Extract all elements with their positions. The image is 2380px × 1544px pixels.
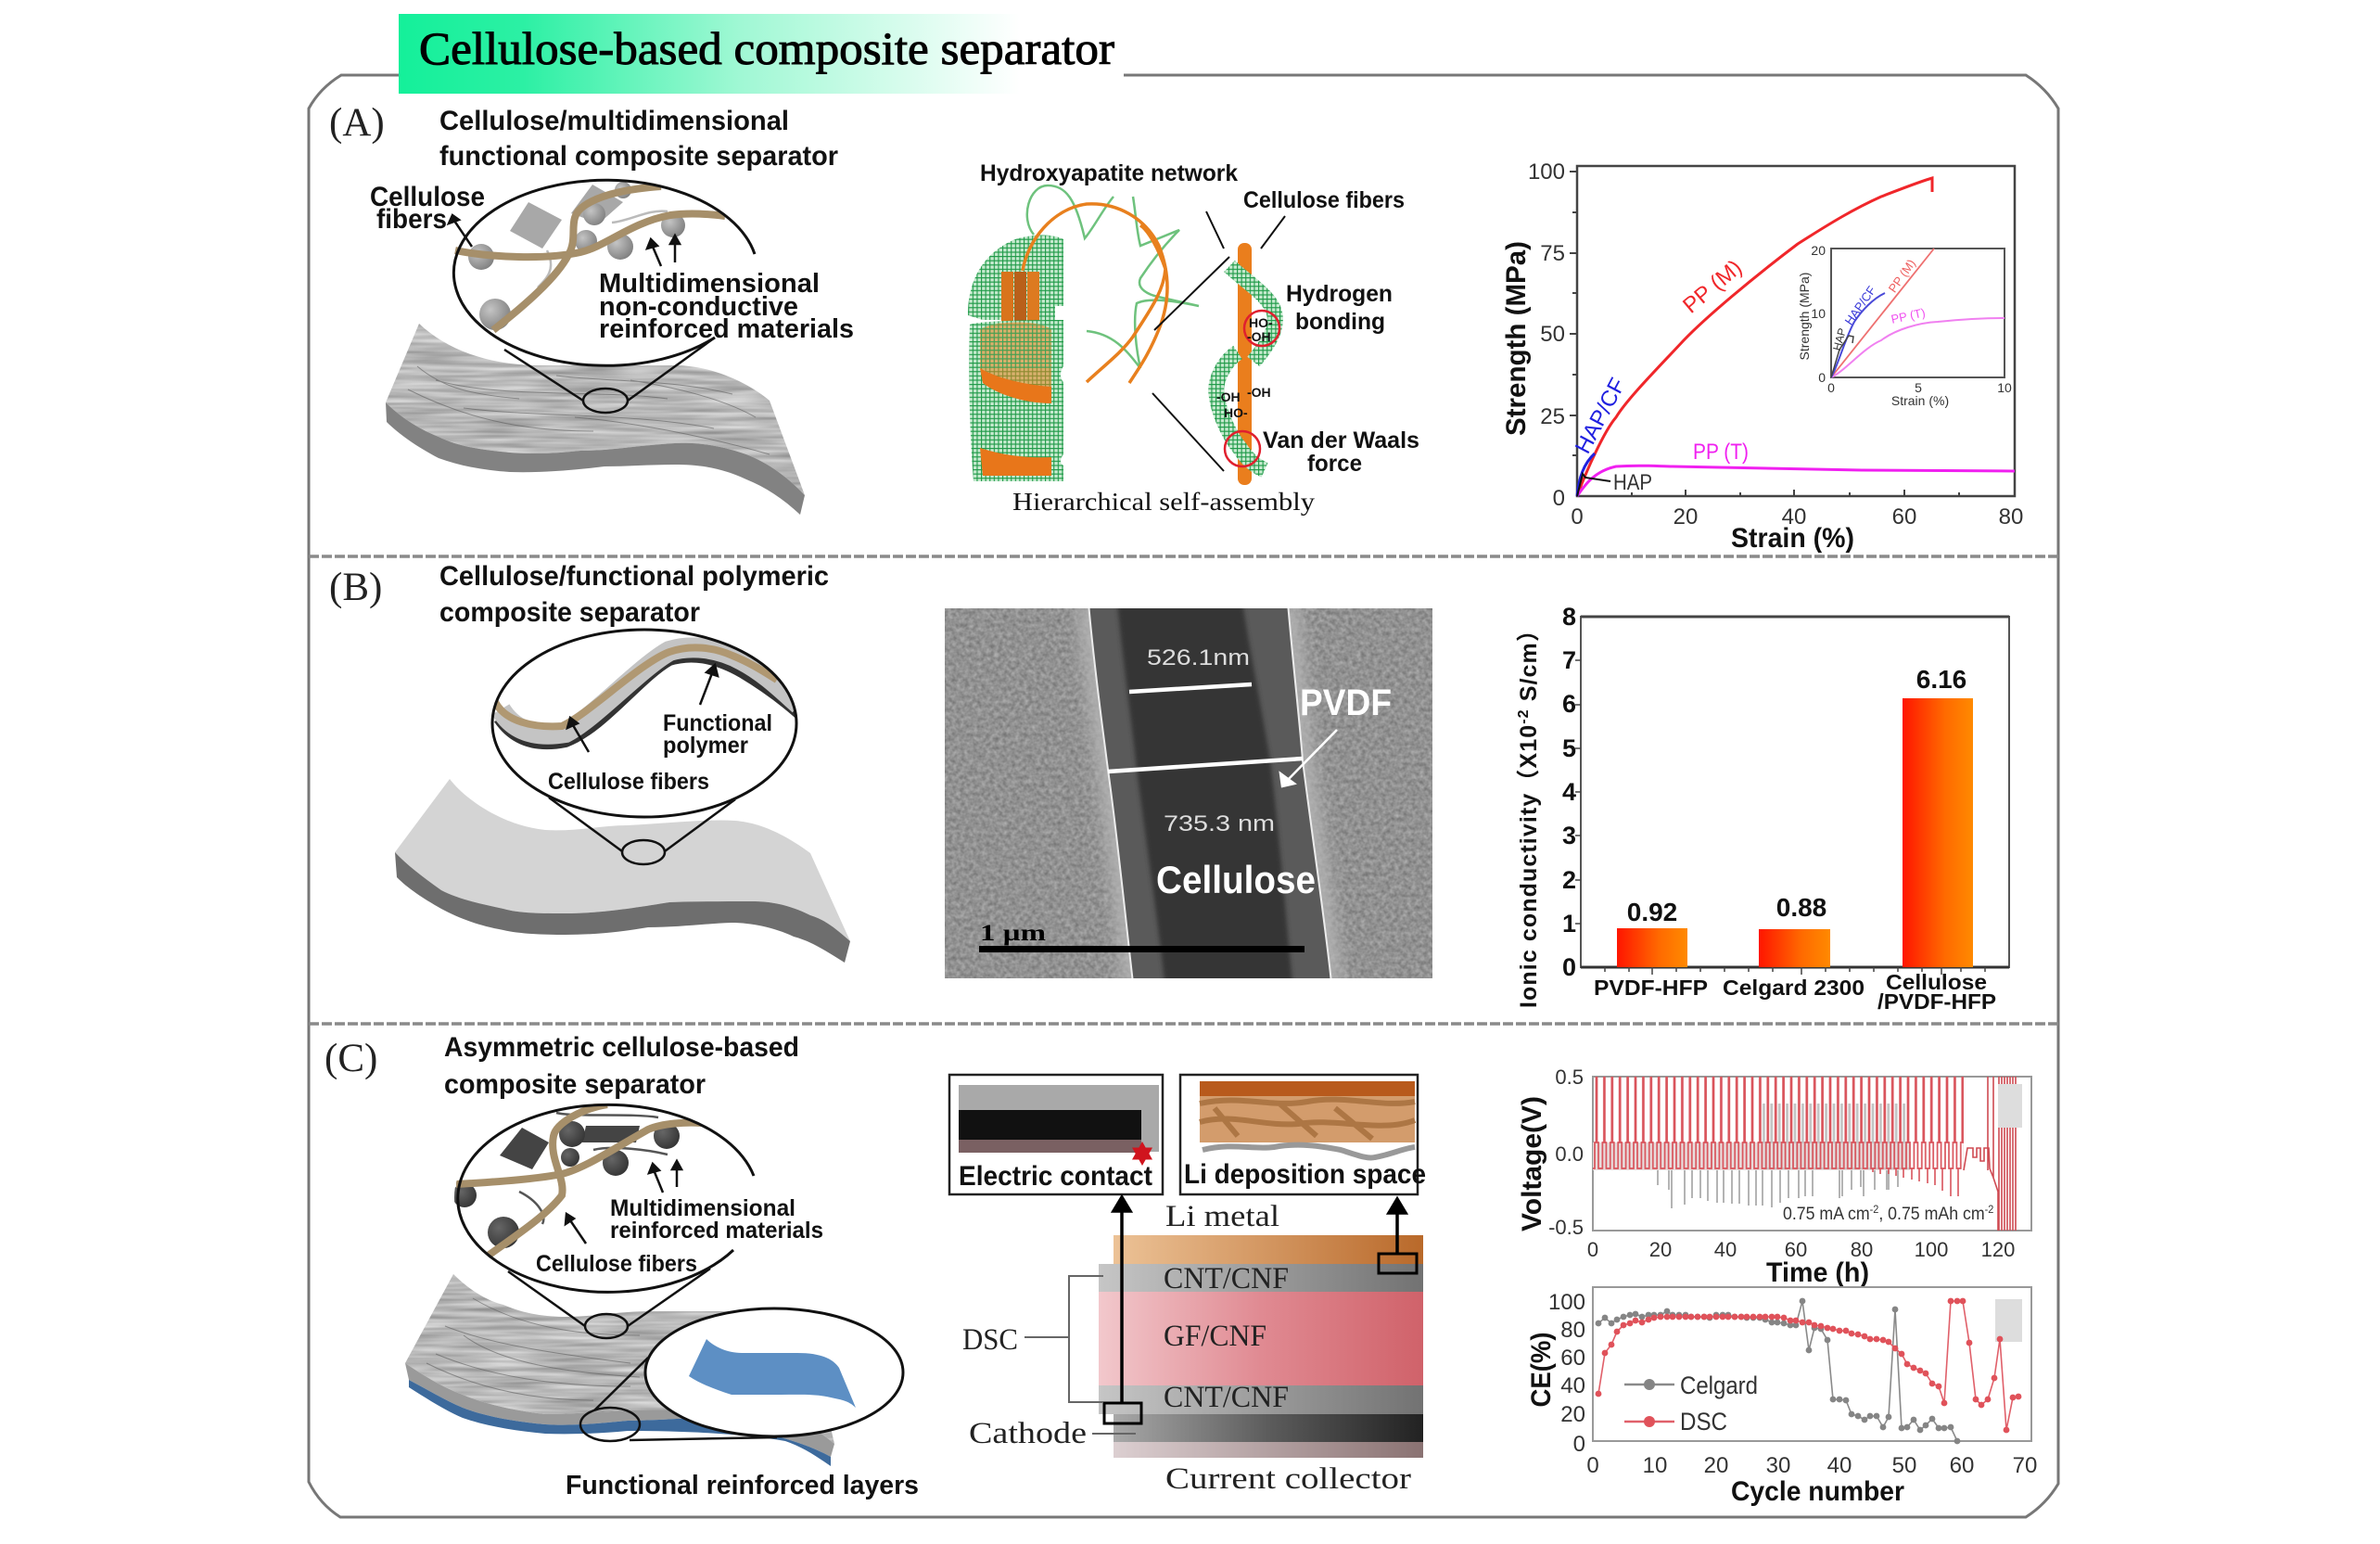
fibre with helical ribbon: -OH bbox=[1247, 385, 1271, 400]
label: multidimensional materials bbox=[599, 269, 854, 344]
inset chart: 0 bbox=[1827, 380, 1835, 395]
labels: hierarchical self-assembly: Hierarchical self-assembly bbox=[1012, 488, 1316, 516]
label: functional reinforced layers: Functional reinforced layers bbox=[566, 1471, 919, 1500]
y-axis ticks: 6 bbox=[1562, 690, 1576, 718]
legend bbox=[1624, 1372, 1758, 1436]
layer labels: Cathode bbox=[969, 1417, 1087, 1450]
hierarchical self-assembly illustration bbox=[968, 160, 1419, 516]
magnified circle C bbox=[452, 1104, 755, 1292]
heading B: composite separator bbox=[439, 597, 700, 628]
layer labels: CNT/CNF bbox=[1164, 1381, 1289, 1414]
labels: functional polymer: Functional bbox=[663, 710, 772, 736]
labels: hierarchical self-assembly: bonding bbox=[1295, 309, 1385, 335]
CE tick labels: 60 bbox=[1950, 1453, 1974, 1478]
arrow to Li deposition bbox=[1389, 1199, 1406, 1254]
inset: electric contact bbox=[949, 1075, 1163, 1194]
fibre with helical ribbon: HO- bbox=[1249, 315, 1273, 330]
label: cellulose fibers: Cellulose bbox=[370, 182, 485, 212]
y-axis ticks: 3 bbox=[1562, 822, 1576, 849]
magnified circle B bbox=[492, 630, 799, 817]
cellulose label: Cellulose bbox=[1156, 858, 1316, 901]
arrow: cellulose fibers bbox=[449, 215, 472, 247]
voltage y title: Voltage(V) bbox=[1517, 1096, 1547, 1231]
labels in circle C: Multidimensional bbox=[610, 1195, 795, 1221]
heading A: functional composite separator bbox=[439, 141, 838, 172]
fibre with helical ribbon: HO- bbox=[1224, 405, 1248, 420]
heading C bbox=[444, 1032, 799, 1100]
voltage tick labels bbox=[1548, 1065, 2015, 1261]
labels: hierarchical self-assembly: Hydrogen bbox=[1286, 281, 1393, 307]
inset chart: 10 bbox=[1811, 306, 1826, 321]
label: multidimensional materials: non-conductive bbox=[599, 292, 798, 322]
inset chart: PP (T) bbox=[1890, 305, 1927, 326]
layer labels bbox=[962, 1200, 1411, 1496]
inset chart: 5 bbox=[1915, 380, 1922, 395]
bar values: 0.88 bbox=[1776, 893, 1826, 922]
layer labels: Current collector bbox=[1165, 1462, 1411, 1496]
CE tick labels: 10 bbox=[1643, 1453, 1667, 1478]
rate annotation: -2 bbox=[1870, 1205, 1878, 1216]
bar Celgard 2300 bbox=[1759, 929, 1830, 967]
axis tick labels: 25 bbox=[1540, 404, 1565, 429]
rate annotation: -2 bbox=[1985, 1205, 1993, 1216]
inset chart: HAP bbox=[1830, 326, 1849, 352]
axis tick labels: 20 bbox=[1674, 504, 1698, 530]
zoom ellipse C1 bbox=[508, 1269, 710, 1338]
y-axis ticks bbox=[1562, 603, 1576, 981]
voltage tick labels: -0.5 bbox=[1548, 1216, 1584, 1239]
axis tick labels: 0 bbox=[1571, 504, 1584, 530]
separator sheet B bbox=[395, 779, 850, 963]
voltage tick labels: 100 bbox=[1915, 1238, 1948, 1261]
category labels: Cellulose bbox=[1886, 970, 1987, 994]
x-axis title: Strain (%) bbox=[1731, 523, 1854, 554]
bar values bbox=[1627, 665, 1966, 926]
labels: hierarchical self-assembly bbox=[980, 160, 1419, 516]
labels: hierarchical self-assembly: Hydroxyapatite network bbox=[980, 160, 1238, 186]
axis tick labels: 40 bbox=[1782, 504, 1806, 530]
inset chart: 10 bbox=[1997, 380, 2012, 395]
heading C: composite separator bbox=[444, 1069, 706, 1100]
PVDF arrow bbox=[1280, 730, 1337, 786]
voltage tick labels: 0.5 bbox=[1555, 1065, 1584, 1089]
panel: C asymmetric separator bbox=[325, 1032, 2037, 1507]
heading A bbox=[439, 106, 838, 172]
curve PP (T) bbox=[1577, 466, 2015, 496]
labels in circle C: reinforced materials bbox=[610, 1218, 823, 1244]
legend: DSC bbox=[1680, 1408, 1727, 1436]
inset: Li deposition space: Li deposition space bbox=[1184, 1159, 1426, 1190]
fibre with helical ribbon: -OH bbox=[1216, 389, 1241, 404]
CE y title: CE(%) bbox=[1526, 1332, 1557, 1408]
inset chart: HAP/CF bbox=[1841, 284, 1878, 327]
chart: stress-strain bbox=[1501, 160, 2023, 554]
rate annotation: , 0.75 mAh cm bbox=[1878, 1203, 1985, 1223]
CE tick labels: 70 bbox=[2013, 1453, 2037, 1478]
inset chart bbox=[1797, 243, 2012, 408]
CE tick labels: 40 bbox=[1827, 1453, 1852, 1478]
zoom lines and pointer arrows bbox=[1152, 211, 1285, 471]
axis tick labels bbox=[1528, 160, 2023, 530]
arrows: reinforced materials bbox=[647, 236, 680, 266]
curve labels bbox=[1571, 255, 1749, 495]
y-axis ticks: 5 bbox=[1562, 734, 1576, 762]
labels: functional polymer: Cellulose fibers bbox=[548, 769, 709, 795]
voltage traces bbox=[1593, 1077, 2016, 1231]
y-axis title: Ionic conductivity（X10 bbox=[1516, 724, 1542, 1008]
bar values: 6.16 bbox=[1916, 665, 1966, 694]
Celgard series bbox=[1598, 1301, 1957, 1441]
y-axis ticks: 8 bbox=[1562, 603, 1576, 631]
chart: coulombic efficiency bbox=[1526, 1287, 2037, 1507]
selection boxes bbox=[1104, 1254, 1417, 1423]
separator sheet C with blue layer bbox=[405, 1274, 834, 1466]
arrows: polymer and fibers bbox=[567, 665, 718, 752]
zoom ellipse A bbox=[504, 338, 715, 413]
axis tick labels: 0 bbox=[1553, 486, 1565, 511]
labels: hierarchical self-assembly: force bbox=[1307, 451, 1362, 477]
legend: Celgard bbox=[1680, 1372, 1758, 1399]
inset chart: 0 bbox=[1818, 370, 1826, 385]
arrows in circle C bbox=[566, 1161, 681, 1244]
y-axis title: -2 bbox=[1516, 708, 1532, 724]
CE tick labels: 60 bbox=[1560, 1346, 1585, 1371]
CE tick labels bbox=[1548, 1290, 2037, 1478]
heading C: Asymmetric cellulose-based bbox=[444, 1032, 799, 1063]
layer labels: Li metal bbox=[1165, 1200, 1279, 1233]
chart: voltage vs time bbox=[1517, 1065, 2031, 1288]
CE tick labels: 80 bbox=[1560, 1318, 1585, 1343]
category labels: PVDF-HFP bbox=[1594, 976, 1708, 1000]
layer labels: DSC bbox=[962, 1323, 1018, 1357]
panel label A: (A) bbox=[329, 101, 385, 145]
layer labels: GF/CNF bbox=[1164, 1320, 1266, 1353]
heading B bbox=[439, 561, 829, 628]
y-axis title: Strength (MPa) bbox=[1501, 241, 1532, 436]
panel label B: (B) bbox=[329, 566, 382, 609]
curve HAP/CF bbox=[1577, 453, 1595, 496]
panel frame bbox=[309, 75, 2058, 1517]
fibre with helical ribbon bbox=[1216, 243, 1279, 485]
TEM micrograph: 735.3 nm bbox=[1164, 811, 1275, 836]
axis tick labels: 50 bbox=[1540, 322, 1565, 347]
bar Cellulose/PVDF-HFP bbox=[1903, 698, 1973, 967]
axis tick labels: 100 bbox=[1528, 160, 1565, 185]
panel label C: (C) bbox=[325, 1037, 377, 1080]
layered cell schematic bbox=[949, 1075, 1426, 1496]
magnified circle A bbox=[451, 178, 755, 365]
CE x title: Cycle number bbox=[1731, 1476, 1904, 1507]
y-axis ticks: 7 bbox=[1562, 646, 1576, 674]
inset chart: Strength (MPa) bbox=[1797, 273, 1812, 360]
panel: B cellulose/functional polymeric bbox=[329, 561, 2009, 1014]
label: multidimensional materials: Multidimensional bbox=[599, 269, 820, 299]
unravelled fibres bbox=[1023, 185, 1199, 383]
CE tick labels: 20 bbox=[1560, 1402, 1585, 1427]
inset: electric contact: Electric contact bbox=[959, 1161, 1152, 1192]
inset chart: 20 bbox=[1811, 243, 1826, 258]
measurement lines bbox=[1108, 684, 1303, 772]
layer stack bbox=[1099, 1235, 1423, 1458]
inset chart: PP (M) bbox=[1886, 257, 1918, 295]
layer labels: CNT/CNF bbox=[1164, 1262, 1289, 1295]
y-axis ticks: 2 bbox=[1562, 866, 1576, 894]
axis tick labels: 80 bbox=[1999, 504, 2023, 530]
voltage tick labels: 60 bbox=[1785, 1238, 1807, 1261]
panel: A cellulose/multidimensional bbox=[329, 101, 2023, 554]
axis tick labels: 75 bbox=[1540, 241, 1565, 266]
hydroxyapatite network cylinder bbox=[968, 236, 1063, 481]
category labels bbox=[1594, 970, 1996, 1014]
y-axis title: S/cm） bbox=[1516, 618, 1542, 708]
CE tick labels: 40 bbox=[1560, 1373, 1585, 1398]
heading B: Cellulose/functional polymeric bbox=[439, 561, 829, 592]
labels: functional polymer bbox=[548, 710, 772, 795]
category labels: /PVDF-HFP bbox=[1877, 989, 1996, 1014]
scale bar bbox=[979, 921, 1305, 952]
labels: hierarchical self-assembly: Van der Waals bbox=[1263, 427, 1419, 453]
y-axis ticks: 0 bbox=[1562, 953, 1576, 981]
PVDF label: PVDF bbox=[1300, 683, 1392, 723]
voltage tick labels: 80 bbox=[1851, 1238, 1873, 1261]
CE tick labels: 0 bbox=[1573, 1432, 1585, 1457]
chart: ionic conductivity bbox=[1516, 603, 2009, 1014]
voltage tick labels: 0 bbox=[1587, 1238, 1598, 1261]
y-axis ticks: 1 bbox=[1562, 910, 1576, 938]
inset: Li deposition space bbox=[1180, 1075, 1426, 1194]
magnified circle: blue layer bbox=[645, 1308, 903, 1436]
label: cellulose fibers bbox=[370, 182, 485, 235]
DSC series bbox=[1598, 1301, 2018, 1430]
labels in circle C: Cellulose fibers bbox=[536, 1251, 697, 1277]
voltage tick labels: 0.0 bbox=[1555, 1142, 1584, 1166]
CE tick labels: 50 bbox=[1892, 1453, 1916, 1478]
labels: functional polymer: polymer bbox=[663, 733, 748, 759]
measurement text: 526.1nm bbox=[1147, 645, 1250, 670]
separator sheet A bbox=[386, 324, 805, 515]
heading A: Cellulose/multidimensional bbox=[439, 106, 789, 136]
CE tick labels: 30 bbox=[1766, 1453, 1790, 1478]
zoom ellipse C2 bbox=[580, 1358, 777, 1441]
label: multidimensional materials: reinforced materials bbox=[599, 314, 854, 344]
rate annotation: 0.75 mA cm bbox=[1783, 1203, 1870, 1223]
curve labels: PP (T) bbox=[1693, 440, 1749, 465]
curve labels: PP (M) bbox=[1678, 255, 1747, 318]
bar PVDF-HFP bbox=[1617, 928, 1687, 967]
fibre with helical ribbon: -OH bbox=[1247, 329, 1271, 344]
DSC bracket bbox=[1025, 1276, 1136, 1434]
title: Cellulose-based composite separator bbox=[419, 22, 1114, 74]
voltage tick labels: 40 bbox=[1714, 1238, 1737, 1261]
voltage tick labels: 120 bbox=[1981, 1238, 2015, 1261]
labels in circle C bbox=[536, 1195, 823, 1277]
curve PP (M) bbox=[1577, 178, 1932, 496]
scale bar: 1 µm bbox=[980, 921, 1046, 946]
TEM micrograph bbox=[945, 603, 1432, 983]
curve labels: HAP bbox=[1613, 470, 1652, 495]
axis tick labels: 60 bbox=[1892, 504, 1916, 530]
title banner bbox=[399, 14, 1114, 94]
CE tick labels: 0 bbox=[1586, 1453, 1599, 1478]
arrow to electric contact bbox=[1114, 1197, 1130, 1403]
bar values: 0.92 bbox=[1627, 898, 1677, 926]
inset chart: Strain (%) bbox=[1891, 393, 1949, 408]
CE tick labels: 20 bbox=[1704, 1453, 1728, 1478]
voltage tick labels: 20 bbox=[1649, 1238, 1672, 1261]
curve HAP bbox=[1577, 474, 1610, 496]
labels: hierarchical self-assembly: Cellulose fibers bbox=[1243, 187, 1405, 213]
zoom ellipse B bbox=[549, 798, 735, 864]
y-axis ticks: 4 bbox=[1562, 778, 1576, 806]
curve labels: HAP/CF bbox=[1571, 374, 1631, 458]
category labels: Celgard 2300 bbox=[1723, 976, 1865, 1000]
CE tick labels: 100 bbox=[1548, 1290, 1585, 1315]
label: cellulose fibers: fibers bbox=[376, 204, 447, 235]
voltage x title: Time (h) bbox=[1766, 1257, 1869, 1288]
